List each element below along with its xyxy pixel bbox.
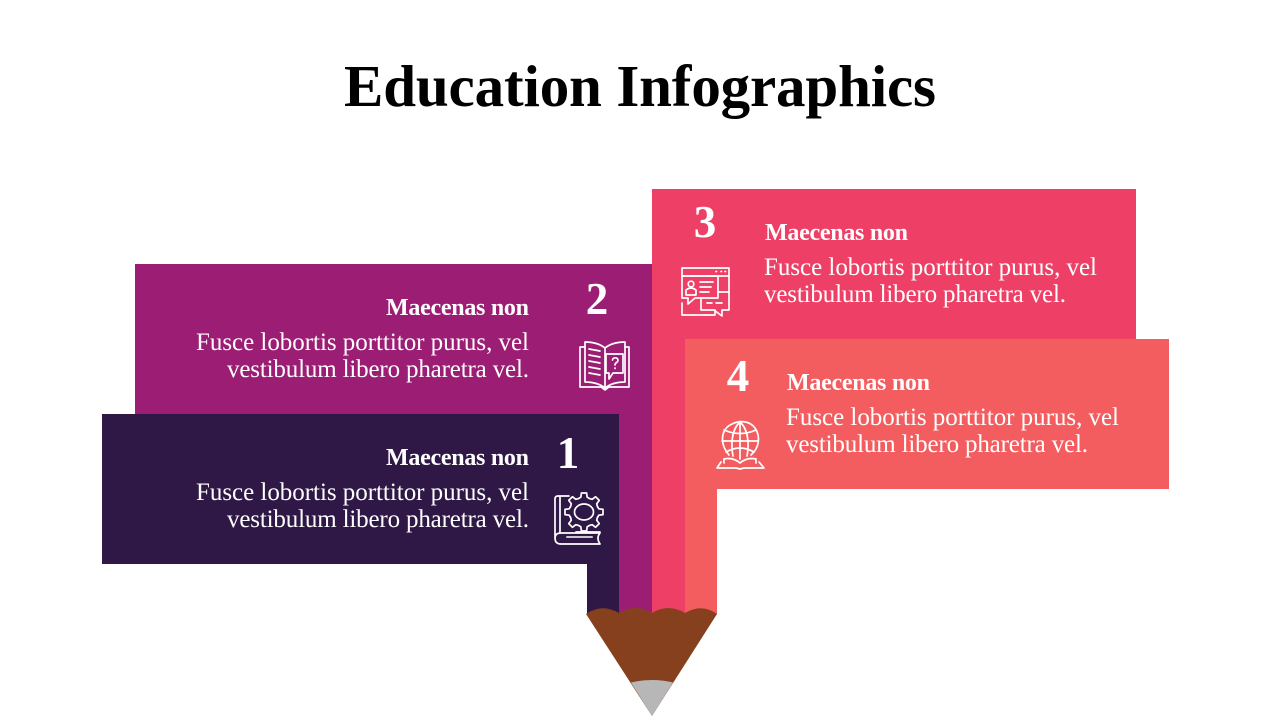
pencil graphite — [631, 680, 673, 716]
panel 2 body text: vestibulum libero pharetra vel. — [227, 356, 529, 383]
panel 1 body text: Fusce lobortis porttitor purus, vel — [196, 479, 529, 506]
panel 2 body text — [196, 329, 529, 383]
panel 1 body text: vestibulum libero pharetra vel. — [227, 506, 529, 533]
icon: globe on book — [717, 422, 764, 469]
panel 3 heading: Maecenas non — [765, 220, 908, 246]
panel 3 number: 3 — [694, 197, 716, 247]
panel 4: coral banner — [685, 339, 1169, 614]
panel 2 body text: Fusce lobortis porttitor purus, vel — [196, 329, 529, 356]
panel 1: dark banner — [102, 414, 619, 614]
panel 2: purple banner — [135, 264, 652, 614]
panel 4 number: 4 — [727, 351, 749, 401]
panel 3: pink banner — [652, 189, 1136, 614]
panel 1 number: 1 — [557, 428, 579, 478]
icon: browser chat — [682, 268, 729, 316]
panel 2 number: 2 — [586, 274, 608, 324]
title: Education Infographics — [344, 53, 936, 119]
panel 3 body text: Fusce lobortis porttitor purus, vel — [764, 254, 1097, 281]
pencil wood — [586, 608, 717, 716]
icon: open book with question — [580, 342, 629, 390]
panel 4 body text: vestibulum libero pharetra vel. — [786, 431, 1088, 458]
pencil tip — [586, 608, 717, 716]
panel 1 heading: Maecenas non — [386, 445, 529, 471]
panel 4 body text: Fusce lobortis porttitor purus, vel — [786, 404, 1119, 431]
panel 4 body text — [786, 404, 1119, 458]
icon: book with gear — [555, 493, 603, 544]
panel 3 body text: vestibulum libero pharetra vel. — [764, 281, 1066, 308]
panel 4 heading: Maecenas non — [787, 370, 930, 396]
panel 1 body text — [196, 479, 529, 533]
panel 3 body text — [764, 254, 1097, 308]
panel 2 heading: Maecenas non — [386, 295, 529, 321]
